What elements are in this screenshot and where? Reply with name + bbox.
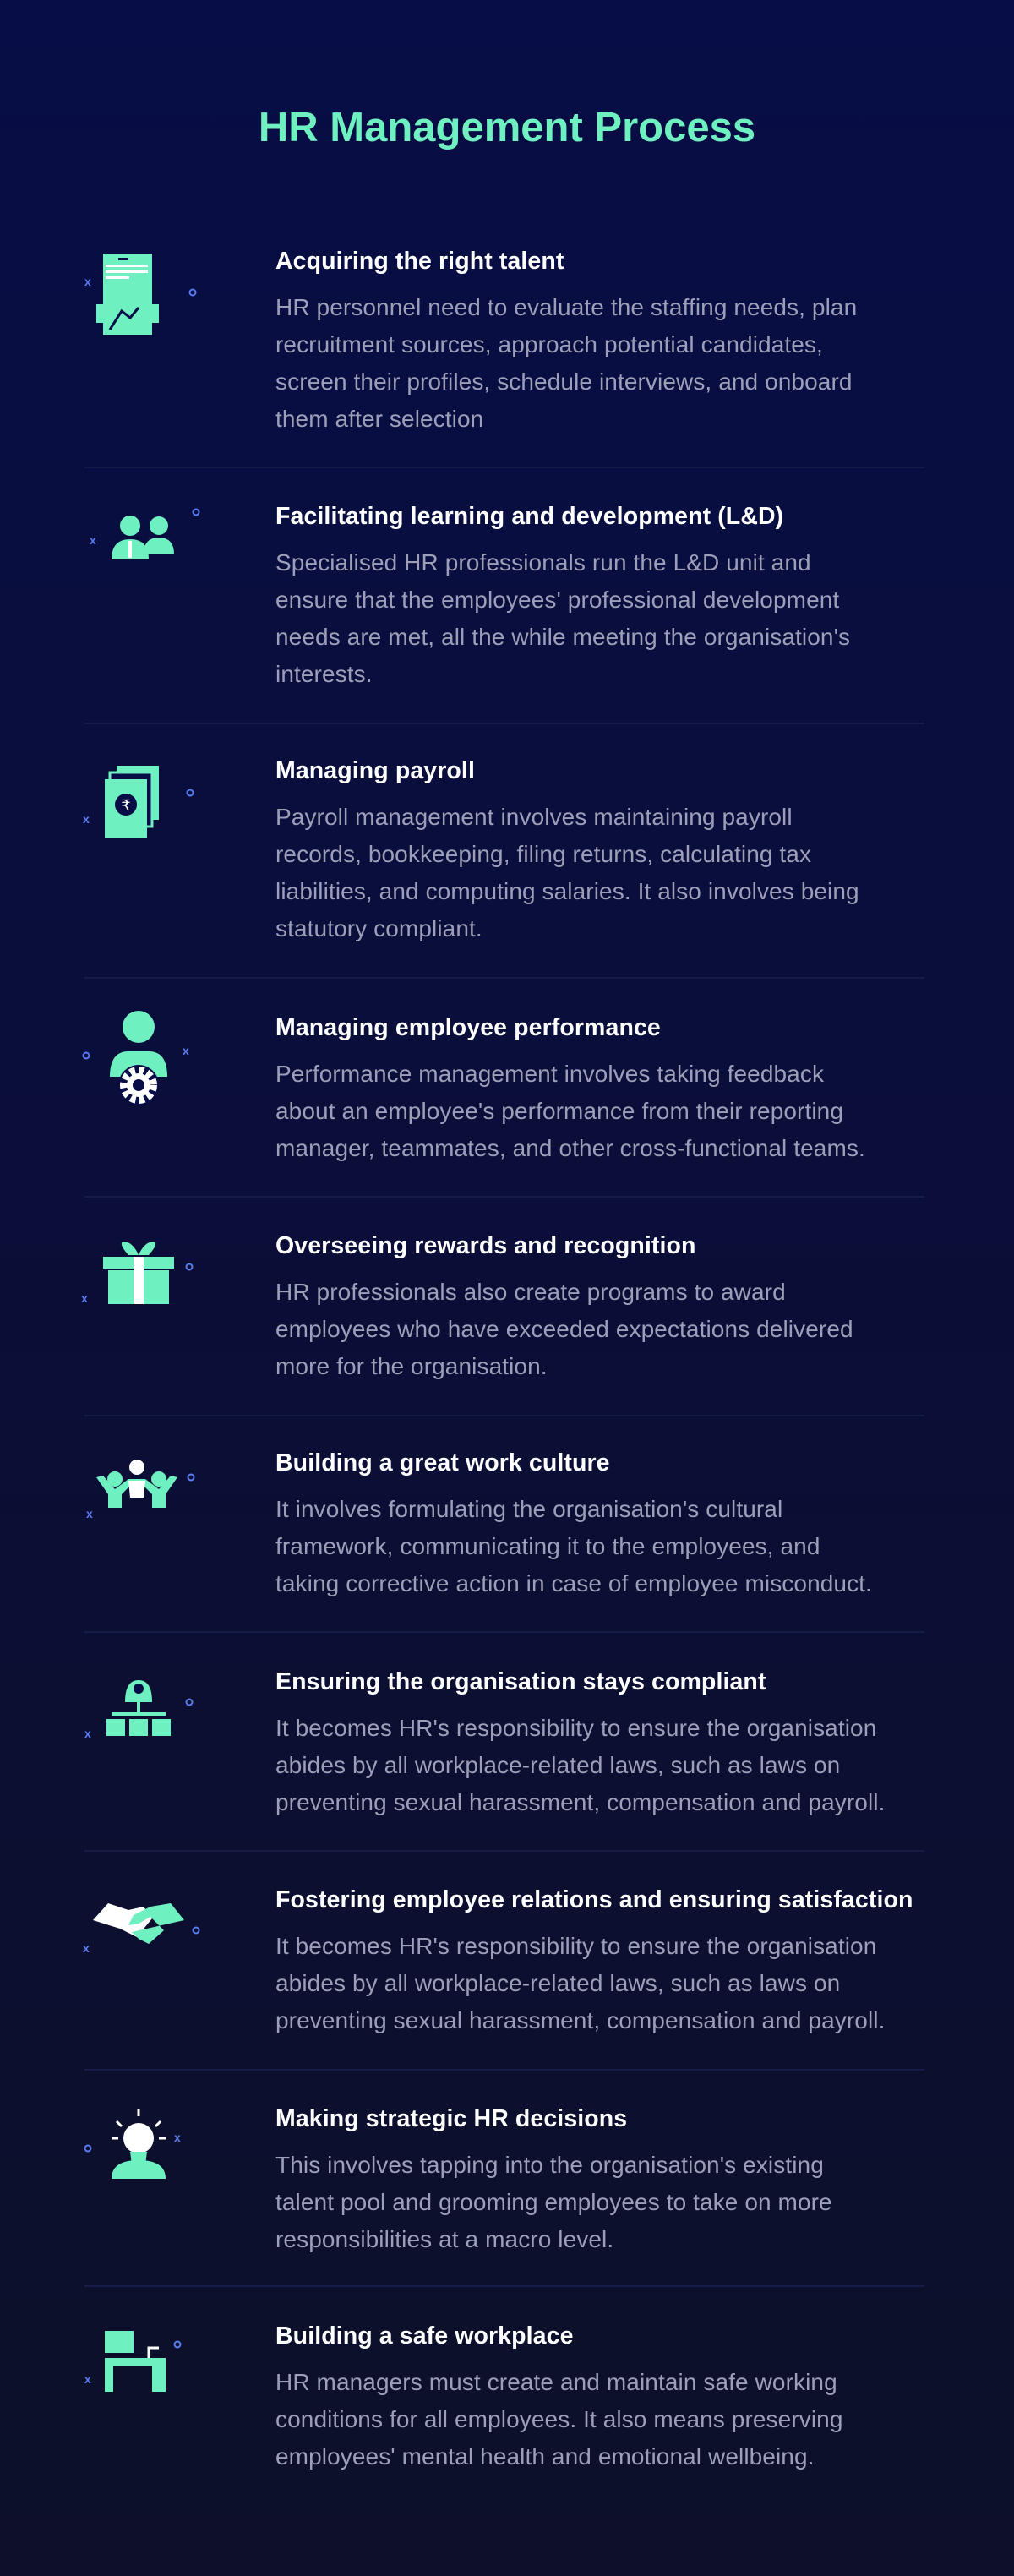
row: safe workplace: conditions for all employees. It also means preserving <box>275 2406 843 2432</box>
icon: team culture: x <box>86 1507 93 1520</box>
row: acquiring: them after selection <box>275 406 483 432</box>
row: rewards <box>275 1232 853 1379</box>
row: L&D <box>275 503 850 687</box>
row: culture <box>275 1449 872 1596</box>
row: performance: about an employee's performance from their reporting <box>275 1098 843 1124</box>
row: L&D: Facilitating learning and development (L&D) <box>275 503 783 530</box>
row: L&D: needs are met, all the while meeting the organisation's <box>275 624 850 650</box>
row: acquiring <box>275 248 857 432</box>
row: payroll: Payroll management involves maintaining payroll <box>275 804 793 830</box>
row: rewards: Overseeing rewards and recognition <box>275 1232 696 1259</box>
row: payroll: liabilities, and computing salaries. It also involves being <box>275 878 859 904</box>
icon: people L&D <box>90 509 199 559</box>
row: relations: preventing sexual harassment, compensation and payroll. <box>275 2007 885 2033</box>
row: compliance: abides by all workplace-related laws, such as laws on <box>275 1752 840 1778</box>
icon: payroll: x <box>83 812 90 826</box>
row: acquiring: screen their profiles, schedule interviews, and onboard <box>275 368 853 395</box>
icon: person gear: x <box>183 1044 189 1057</box>
row: acquiring: Acquiring the right talent <box>275 248 564 275</box>
icon: handshake <box>83 1903 199 1955</box>
icon: gift <box>81 1242 193 1305</box>
row: compliance: preventing sexual harassment, compensation and payroll. <box>275 1789 885 1815</box>
row: relations: abides by all workplace-related laws, such as laws on <box>275 1970 840 1996</box>
icon: people L&D: x <box>90 533 96 547</box>
icon: payroll <box>83 766 194 838</box>
row: performance: Managing employee performance <box>275 1014 661 1041</box>
row: strategic: This involves tapping into the organisation's existing <box>275 2152 824 2178</box>
icon: lightbulb: x <box>174 2131 181 2144</box>
icon: contract handshake: x <box>84 275 91 288</box>
icon: workstation: x <box>84 2372 91 2386</box>
row: safe workplace: HR managers must create and maintain safe working <box>275 2369 837 2395</box>
row: performance: Performance management involves taking feedback <box>275 1061 824 1087</box>
row: strategic: responsibilities at a macro level. <box>275 2226 613 2252</box>
row: strategic: Making strategic HR decisions <box>275 2105 627 2132</box>
row: payroll: Managing payroll <box>275 757 475 784</box>
row: safe workplace: employees' mental health and emotional wellbeing. <box>275 2443 815 2470</box>
row: payroll: records, bookkeeping, filing returns, calculating tax <box>275 841 811 867</box>
row: payroll: statutory compliant. <box>275 915 482 941</box>
row: compliance: Ensuring the organisation stays compliant <box>275 1668 766 1695</box>
row: L&D: Specialised HR professionals run the L&D unit and <box>275 549 811 576</box>
row: acquiring: HR personnel need to evaluate the staffing needs, plan <box>275 294 857 320</box>
icon: team culture <box>86 1460 194 1520</box>
icon: compliance hierarchy: x <box>84 1727 91 1740</box>
icon: compliance hierarchy <box>84 1680 193 1740</box>
row: L&D: interests. <box>275 661 373 687</box>
row: strategic <box>275 2105 832 2252</box>
row: L&D: ensure that the employees' professional development <box>275 587 839 613</box>
row: relations <box>275 1886 913 2033</box>
icon: payroll: ₹ <box>121 797 131 815</box>
icon: person gear <box>83 1011 189 1105</box>
row: strategic: talent pool and grooming employees to take on more <box>275 2189 832 2215</box>
row: performance <box>275 1014 865 1161</box>
row: compliance: It becomes HR's responsibility to ensure the organisation <box>275 1715 876 1741</box>
icon: lightbulb <box>84 2109 181 2179</box>
row: relations: Fostering employee relations and ensuring satisfaction <box>275 1886 913 1913</box>
row: culture: framework, communicating it to the employees, and <box>275 1533 820 1559</box>
row: payroll <box>275 757 859 941</box>
row: safe workplace <box>275 2322 843 2470</box>
title: HR Management Process <box>259 105 755 150</box>
row: rewards: more for the organisation. <box>275 1353 548 1379</box>
icon: handshake: x <box>83 1941 90 1955</box>
icon: gift: x <box>81 1291 88 1305</box>
row: acquiring: recruitment sources, approach potential candidates, <box>275 331 823 357</box>
row: culture: taking corrective action in case of employee misconduct. <box>275 1570 872 1596</box>
icon: workstation <box>84 2331 181 2392</box>
row: rewards: HR professionals also create programs to award <box>275 1279 786 1305</box>
row: performance: manager, teammates, and other cross-functional teams. <box>275 1135 865 1161</box>
row: culture: Building a great work culture <box>275 1449 610 1476</box>
row: rewards: employees who have exceeded expectations delivered <box>275 1316 853 1342</box>
row: compliance <box>275 1668 885 1815</box>
icon: contract handshake <box>84 254 196 335</box>
row: culture: It involves formulating the organisation's cultural <box>275 1496 782 1522</box>
row: relations: It becomes HR's responsibility to ensure the organisation <box>275 1933 876 1959</box>
row: safe workplace: Building a safe workplace <box>275 2322 574 2350</box>
